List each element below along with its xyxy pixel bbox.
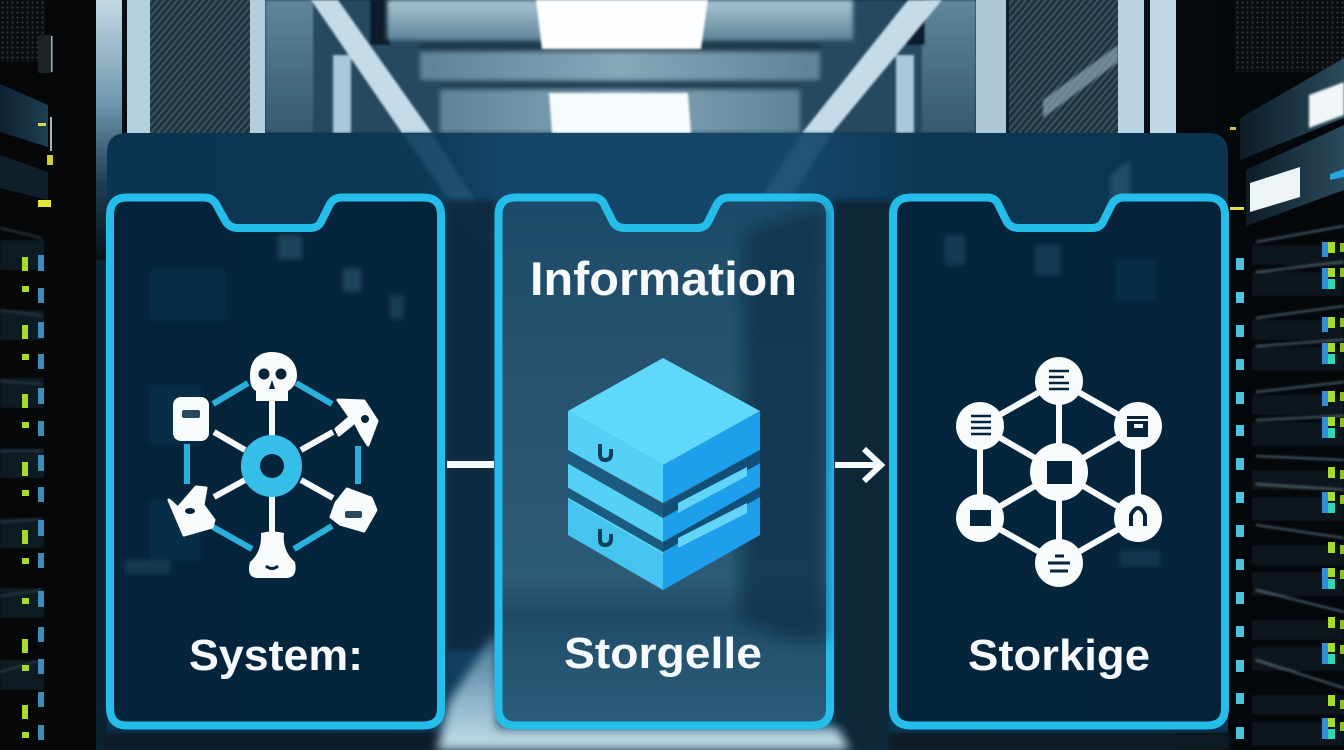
icon: system hub network xyxy=(169,352,377,578)
right rack rows xyxy=(1252,226,1344,746)
panel: system xyxy=(110,198,441,726)
icon: hammer shard xyxy=(336,400,377,445)
arrow: middle to right xyxy=(835,449,881,481)
ceiling lights xyxy=(536,0,708,133)
heading: information: Information xyxy=(530,252,797,305)
label: system: System: xyxy=(189,631,363,680)
icon: node bottom xyxy=(1035,539,1083,587)
label: storgelle: Storgelle xyxy=(564,629,762,678)
icon: badge xyxy=(173,397,209,441)
door posts xyxy=(96,0,1176,260)
background detail: ghost servers in right card xyxy=(945,235,1160,566)
floor light xyxy=(437,630,850,750)
icon: node top xyxy=(1035,357,1083,405)
connector: left to middle xyxy=(447,461,494,468)
right server rack xyxy=(1222,0,1344,750)
panel: storage network xyxy=(893,198,1225,726)
icon: storage node network xyxy=(956,357,1162,587)
right rack LEDs xyxy=(1236,242,1344,739)
translucent backing panel xyxy=(107,133,1228,733)
panel: information xyxy=(498,198,830,726)
icon: skull xyxy=(250,352,297,401)
icon: node upper left xyxy=(956,402,1004,450)
icon: stacked storage cube xyxy=(567,358,760,590)
icon: node lower left xyxy=(956,494,1004,542)
icon: node lower right xyxy=(1114,494,1162,542)
right dark column xyxy=(1176,0,1226,750)
background detail: dark right side of middle card xyxy=(740,205,825,640)
background detail: side shadows and bottom strip xyxy=(100,200,1230,750)
left rack rows xyxy=(0,228,44,690)
left rack LEDs xyxy=(22,257,29,738)
background detail: ghost servers in left card xyxy=(125,235,404,574)
icon: shard lower left xyxy=(169,487,214,535)
icon: bone xyxy=(249,532,296,578)
background detail: ghost beams through panel xyxy=(402,133,1130,240)
icon: hub xyxy=(241,435,302,497)
icon: node upper right xyxy=(1114,402,1162,450)
label: storkige: Storkige xyxy=(968,631,1150,680)
aisle frame beams xyxy=(311,0,942,133)
mesh rack doors xyxy=(150,0,250,133)
icon: shard lower right xyxy=(331,489,376,531)
left server rack xyxy=(0,0,96,750)
